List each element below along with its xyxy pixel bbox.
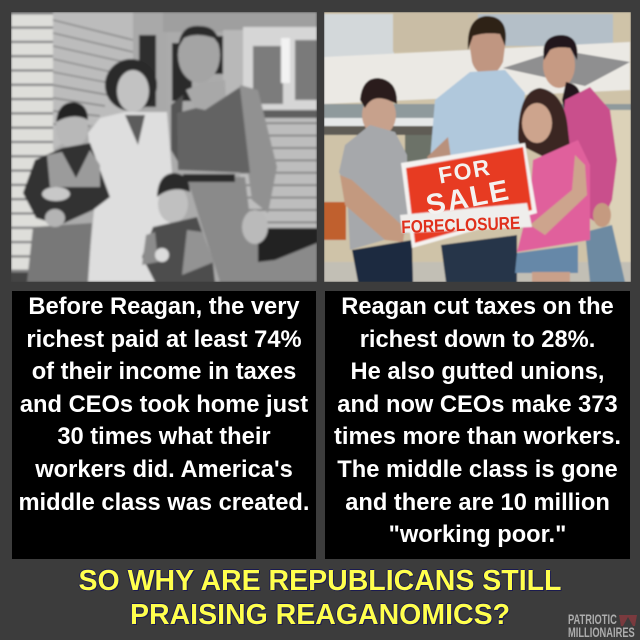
panel: after Reagan text: and there are 10 million xyxy=(345,490,610,516)
headline question xyxy=(78,565,562,631)
photo: modern family with foreclosure sign xyxy=(324,12,631,282)
panel: after Reagan text: Reagan cut taxes on the xyxy=(341,294,614,320)
panel: before Reagan text: 30 times what their xyxy=(57,424,271,450)
panel: after Reagan text: "working poor." xyxy=(389,522,566,548)
headline question: PRAISING REAGANOMICS? xyxy=(130,599,510,631)
father xyxy=(470,20,505,76)
small boy xyxy=(158,185,188,223)
panel: before Reagan text: Before Reagan, the very xyxy=(28,294,300,320)
man xyxy=(178,27,220,83)
woman xyxy=(105,59,157,111)
logo: Patriotic Millionaires: MILLIONAIRES xyxy=(568,625,635,640)
sign text: SALE xyxy=(423,174,513,222)
icon: red triangle mark xyxy=(619,615,637,626)
panel: after Reagan text: He also gutted unions, xyxy=(350,359,604,385)
panel: after Reagan text xyxy=(325,291,630,559)
panel: after Reagan text: times more than workers. xyxy=(334,424,621,450)
logo: Patriotic Millionaires: PATRIOTIC xyxy=(568,612,617,627)
sign text: FORECLOSURE xyxy=(401,213,521,237)
sign xyxy=(401,143,537,248)
sign text xyxy=(401,154,521,237)
panel: before Reagan text: workers did. America's xyxy=(35,457,293,483)
panel: after Reagan text: richest down to 28%. xyxy=(360,327,595,353)
panel: after Reagan text: and now CEOs make 373 xyxy=(337,392,618,418)
panel: before Reagan text: middle class was created. xyxy=(18,490,309,516)
panel: before Reagan text: richest paid at least 74% xyxy=(26,327,302,353)
mother xyxy=(543,42,575,88)
boy xyxy=(362,94,396,136)
photo: 1950s family in front of house xyxy=(11,12,317,282)
panel: before Reagan text: of their income in taxes xyxy=(32,359,296,385)
logo: Patriotic Millionaires xyxy=(568,612,637,640)
panel: before Reagan text: and CEOs took home just xyxy=(20,392,308,418)
girl xyxy=(518,88,572,165)
sign text: FOR xyxy=(436,154,493,189)
panel: after Reagan text: The middle class is gone xyxy=(337,457,618,483)
headline question: SO WHY ARE REPUBLICANS STILL xyxy=(79,565,561,597)
boy left xyxy=(56,108,88,148)
panel: before Reagan text xyxy=(12,291,316,559)
